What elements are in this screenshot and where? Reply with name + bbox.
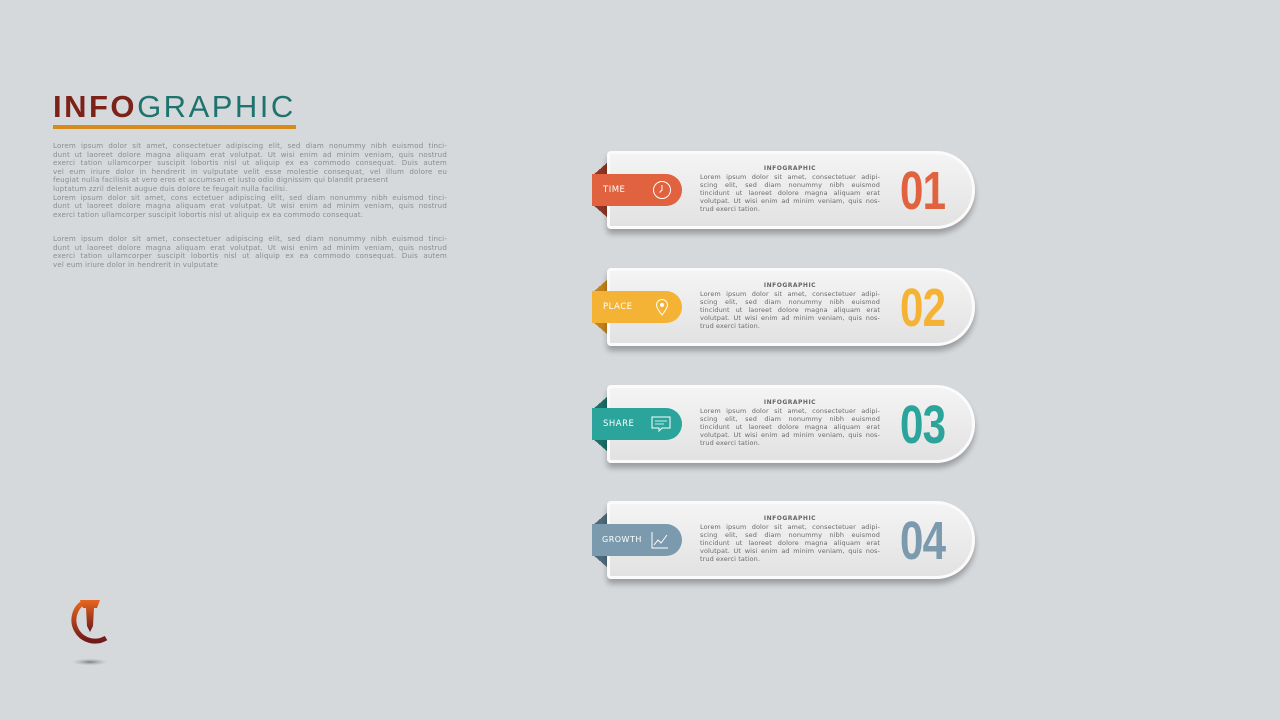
panel: card 04 growth: scing elit, sed diam nonummy nibh euismod [700, 531, 880, 539]
panel: card 03 share: INFOGRAPHIC [764, 399, 816, 406]
panel: card 02 place: tincidunt ut laoreet dolore magna aliquam erat [700, 306, 880, 314]
panel: card 03 share: Lorem ipsum dolor sit amet, consectetuer adipi- [700, 407, 880, 415]
panel: card 01 time: Lorem ipsum dolor sit amet, consectetuer adipi- [700, 173, 880, 181]
text block: paragraph 2 [53, 235, 447, 269]
panel: card 04 growth: volutpat. Ut wisi enim ad minim veniam, quis nos- [700, 547, 880, 555]
panel: card 02 place: volutpat. Ut wisi enim ad minim veniam, quis nos- [700, 314, 880, 322]
panel: card 04 growth: INFOGRAPHIC [764, 515, 816, 522]
tab: SHARE with chat icon [592, 408, 682, 440]
panel: card 04 growth: Lorem ipsum dolor sit amet, consectetuer adipi- [700, 523, 880, 531]
logo [71, 600, 108, 665]
panel: card 01 time: tincidunt ut laoreet dolore magna aliquam erat [700, 189, 880, 197]
panel: card 01 time: 01 [900, 161, 945, 221]
tab: PLACE with pin icon: PLACE [603, 302, 633, 312]
panel: card 01 time [592, 151, 978, 237]
panel: card 02 place [592, 268, 978, 354]
panel: card 02 place: scing elit, sed diam nonummy nibh euismod [700, 298, 880, 306]
panel: card 03 share: 03 [900, 395, 945, 455]
tab: TIME with clock icon [592, 174, 682, 206]
panel: card 03 share [592, 385, 978, 471]
panel: card 04 growth: tincidunt ut laoreet dolore magna aliquam erat [700, 539, 880, 547]
panel: card 02 place: trud exerci tation. [700, 322, 760, 330]
panel: card 01 time: volutpat. Ut wisi enim ad minim veniam, quis nos- [700, 197, 880, 205]
panel: card 01 time: trud exerci tation. [700, 205, 760, 213]
panel: card 03 share: tincidunt ut laoreet dolore magna aliquam erat [700, 423, 880, 431]
panel: card 04 growth: 04 [900, 511, 945, 571]
panel: card 03 share: scing elit, sed diam nonummy nibh euismod [700, 415, 880, 423]
panel: card 02 place: 02 [900, 278, 945, 338]
panel: card 04 growth [592, 501, 978, 587]
title: INFOGRAPHIC [53, 89, 296, 124]
text block: paragraph 1 [53, 142, 447, 219]
tab: GROWTH with chart icon [592, 524, 682, 556]
panel: card 02 place: INFOGRAPHIC [764, 282, 816, 289]
panel: card 04 growth: trud exerci tation. [700, 555, 760, 563]
panel: card 03 share: trud exerci tation. [700, 439, 760, 447]
panel: card 01 time: INFOGRAPHIC [764, 165, 816, 172]
tab: TIME with clock icon: TIME [603, 185, 625, 195]
panel: card 02 place: Lorem ipsum dolor sit amet, consectetuer adipi- [700, 290, 880, 298]
panel: card 03 share: volutpat. Ut wisi enim ad minim veniam, quis nos- [700, 431, 880, 439]
tab: GROWTH with chart icon: GROWTH [602, 535, 642, 544]
tab: PLACE with pin icon [592, 291, 682, 323]
panel: card 01 time: scing elit, sed diam nonummy nibh euismod [700, 181, 880, 189]
tab: SHARE with chat icon: SHARE [603, 419, 634, 429]
